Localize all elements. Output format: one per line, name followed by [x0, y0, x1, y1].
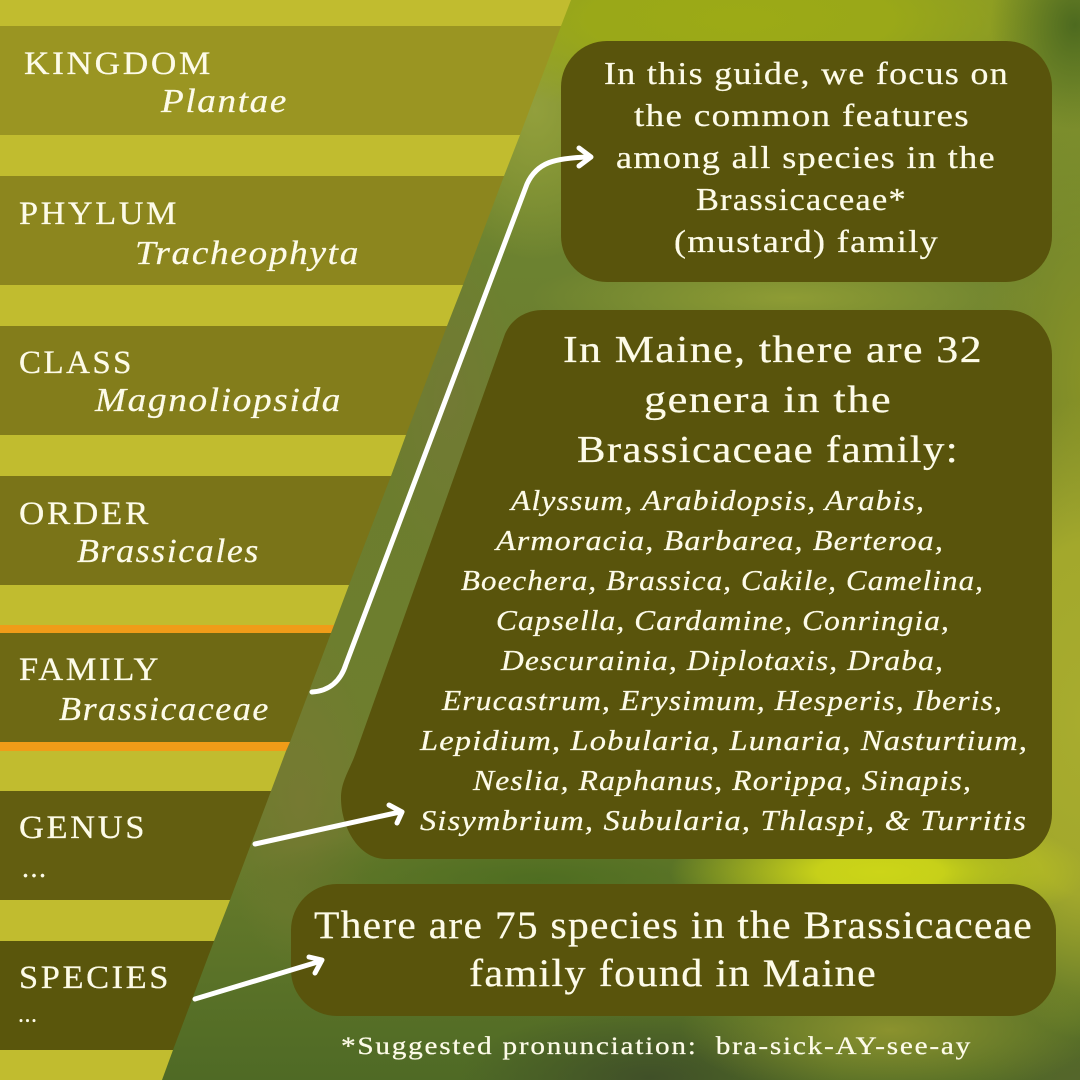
callout: genera in Maine: Sisymbrium, Subularia, Thlaspi, & Turritis — [420, 806, 1027, 837]
panel: class: CLASS — [19, 345, 134, 381]
panel: species: ... — [18, 1002, 37, 1028]
panel: family with orange highlight: Brassicaceae — [59, 691, 270, 728]
panel: kingdom: Plantae — [160, 83, 288, 120]
callout: guide focus — [561, 41, 1052, 282]
panel: class: Magnoliopsida — [94, 382, 342, 419]
callout: species count: There are 75 species in the Brassicaceae — [314, 904, 1033, 947]
panel: genus — [0, 791, 271, 900]
panel: phylum: PHYLUM — [19, 196, 179, 232]
callout: guide focus: Brassicaceae* — [696, 181, 907, 217]
panel: order — [0, 476, 391, 585]
panel: phylum — [0, 176, 504, 285]
panel: species — [0, 941, 214, 1050]
callout: genera in Maine: Capsella, Cardamine, Conringia, — [496, 606, 950, 637]
callout: genera in Maine: Neslia, Raphanus, Rorippa, Sinapis, — [472, 766, 972, 797]
arrow: genus to genera list — [255, 805, 402, 844]
panel: kingdom: KINGDOM — [24, 46, 213, 82]
callout: genera in Maine: genera in the — [644, 379, 892, 421]
callout: genera in Maine: Lepidium, Lobularia, Lunaria, Nasturtium, — [419, 726, 1028, 757]
callout: species count — [291, 884, 1056, 1016]
panel: family with orange highlight: FAMILY — [19, 652, 161, 688]
callout: genera in Maine: Descurainia, Diplotaxis, Draba, — [500, 646, 944, 677]
callout: genera in Maine — [341, 310, 1052, 859]
panel: order: Brassicales — [77, 533, 260, 570]
arrow: species to species count — [195, 957, 322, 999]
arrow: family to guide focus — [312, 148, 591, 692]
callout: genera in Maine: Erucastrum, Erysimum, Hesperis, Iberis, — [441, 686, 1003, 717]
callout: genera in Maine: Armoracia, Barbarea, Berteroa, — [494, 526, 944, 557]
panel: kingdom — [0, 26, 561, 135]
light stripes of taxonomy pyramid — [0, 0, 571, 1080]
callout: guide focus: the common features — [634, 97, 970, 133]
callout: guide focus: among all species in the — [616, 139, 996, 175]
callout: genera in Maine: Alyssum, Arabidopsis, Arabis, — [509, 486, 925, 517]
panel: genus: GENUS — [19, 810, 147, 846]
callout: genera in Maine: Brassicaceae family: — [577, 429, 959, 471]
panel: class — [0, 326, 447, 435]
panel: order: ORDER — [19, 496, 151, 532]
panel: family with orange highlight — [0, 625, 334, 751]
callout: genera in Maine: In Maine, there are 32 — [563, 329, 983, 371]
callout: genera in Maine: Boechera, Brassica, Cakile, Camelina, — [461, 566, 984, 597]
panel: genus: ... — [22, 853, 46, 884]
panel: species: SPECIES — [19, 960, 171, 996]
callout: guide focus: In this guide, we focus on — [604, 55, 1009, 91]
callout: species count: family found in Maine — [469, 952, 877, 995]
panel: phylum: Tracheophyta — [135, 235, 360, 272]
footnote: pronunciation: *Suggested pronunciation: bra-sick-AY-see-ay — [341, 1033, 972, 1060]
callout: guide focus: (mustard) family — [674, 223, 939, 259]
